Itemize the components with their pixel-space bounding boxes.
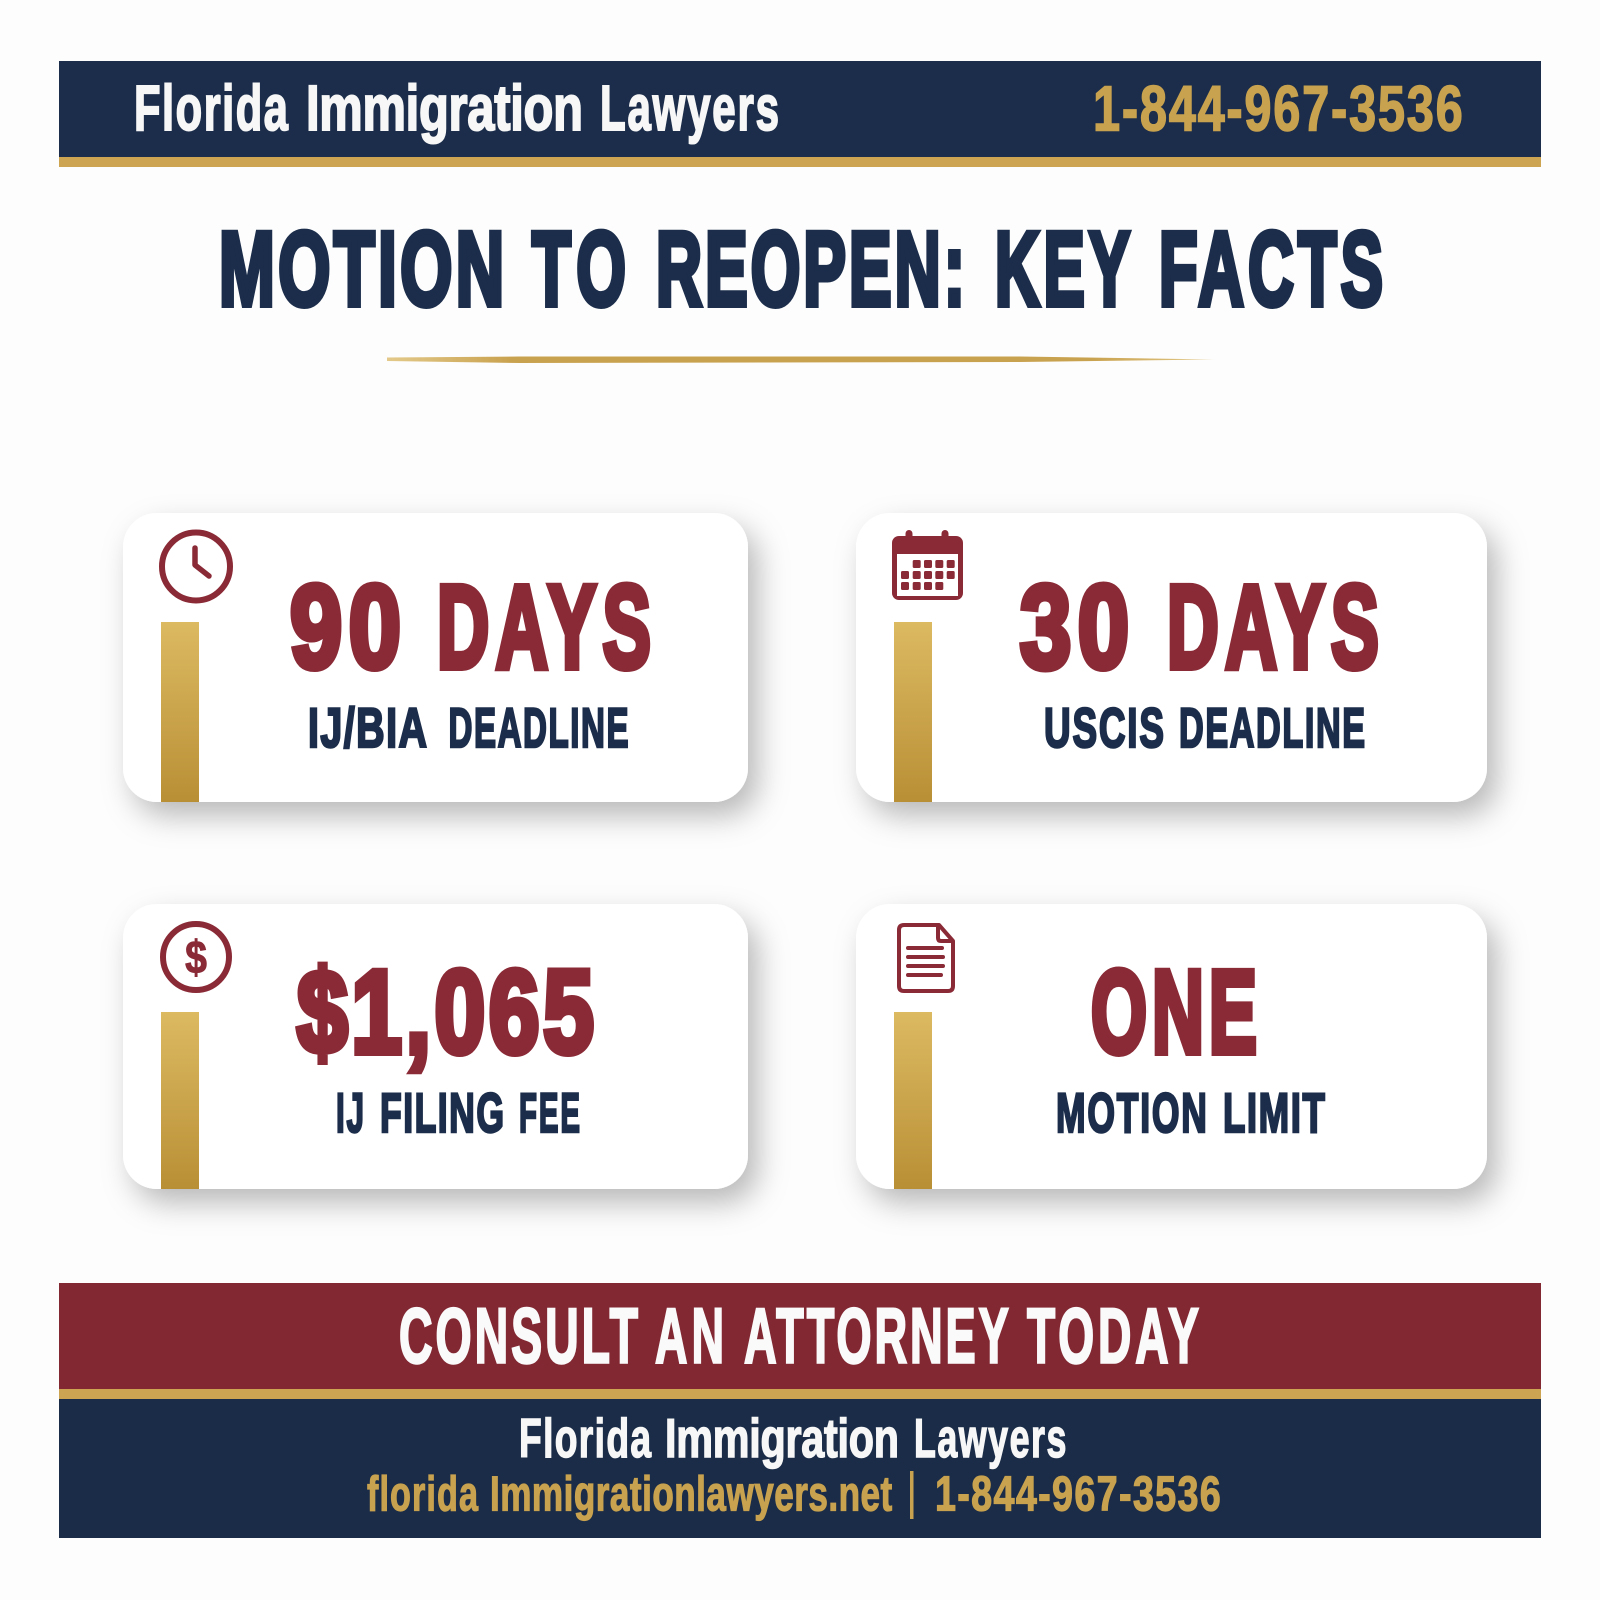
header firm name (134, 73, 779, 145)
label: USCIS deadline (1044, 696, 1365, 760)
gold bar (161, 1012, 199, 1189)
stat: one: ONE (1091, 946, 1257, 1078)
label: IJ/BIA deadline: DEADLINE (448, 696, 629, 759)
icon: dollar coin (163, 924, 229, 990)
title: FACTS (1159, 212, 1383, 328)
call to action text: CONSULT (399, 1292, 638, 1380)
title: KEY (995, 211, 1130, 328)
gold bar (161, 622, 199, 802)
stat: 90 days: DAYS (437, 560, 651, 693)
icon: dollar coin: $ (185, 932, 207, 984)
footer firm name: Florida (519, 1408, 652, 1469)
label: IJ filing fee: FILING (380, 1082, 504, 1144)
footer website: florida (367, 1466, 478, 1521)
call to action text: AN (655, 1293, 724, 1380)
footer panel (59, 1399, 1541, 1538)
stat: 30 days (1020, 561, 1379, 693)
header firm name: Florida (134, 73, 288, 144)
stat: 90 days (290, 560, 651, 693)
gold divider (59, 1389, 1541, 1399)
gold bar (894, 1012, 932, 1189)
panel: 30 days (856, 513, 1487, 802)
stat: 30 days: DAYS (1167, 561, 1379, 693)
footer separator (910, 1471, 914, 1519)
footer phone number: 1-844-967-3536 (935, 1467, 1221, 1522)
title underline (387, 356, 1214, 363)
footer firm name (519, 1408, 1066, 1470)
header firm name: Immigration (306, 73, 583, 145)
title (219, 210, 1383, 328)
stat: 30 days: 30 (1020, 562, 1129, 693)
header phone number: 1-844-967-3536 (1093, 73, 1463, 145)
icon: clock (162, 532, 230, 600)
title: MOTION (219, 210, 504, 328)
footer firm name: Lawyers (914, 1408, 1066, 1469)
footer website: Immigrationlawyers.net (490, 1467, 892, 1522)
call to action text: ATTORNEY (744, 1292, 1009, 1380)
label: motion limit: MOTION (1056, 1082, 1207, 1144)
header banner (59, 61, 1541, 167)
header firm name: Lawyers (600, 73, 779, 144)
label: IJ/BIA deadline (308, 696, 629, 760)
panel: 90 days (123, 513, 748, 802)
panel: filing fee (123, 904, 748, 1189)
call to action text (399, 1292, 1199, 1380)
panel: motion limit (856, 904, 1487, 1189)
label: IJ/BIA deadline: IJ/BIA (308, 697, 427, 760)
label: motion limit (1056, 1082, 1325, 1145)
label: motion limit: LIMIT (1223, 1082, 1325, 1145)
gold bar (894, 622, 932, 802)
label: IJ filing fee: FEE (519, 1082, 580, 1145)
icon: document (899, 925, 953, 991)
stat: $1,065: $1,065 (297, 947, 594, 1078)
call to action banner (59, 1283, 1541, 1389)
label: USCIS deadline: DEADLINE (1179, 696, 1365, 759)
label: IJ filing fee: IJ (336, 1081, 364, 1144)
title: REOPEN: (656, 211, 965, 328)
title: TO (532, 211, 626, 328)
label: USCIS deadline: USCIS (1044, 697, 1164, 760)
footer firm name: Immigration (665, 1409, 899, 1470)
icon: calendar (892, 530, 963, 600)
label: IJ filing fee (336, 1081, 580, 1145)
stat: 90 days: 90 (290, 561, 401, 693)
call to action text: TODAY (1027, 1292, 1199, 1380)
